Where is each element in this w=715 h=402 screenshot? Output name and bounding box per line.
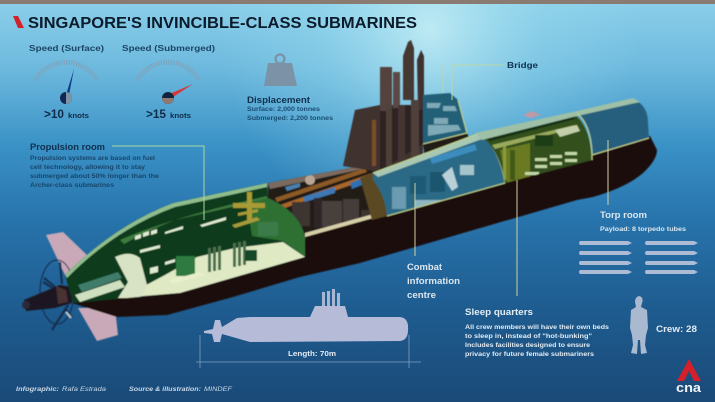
section: central machinery	[268, 160, 377, 238]
propeller	[22, 260, 74, 330]
conning tower	[343, 40, 470, 172]
masts	[372, 40, 424, 166]
sleep quarters text: Sleep quarters	[465, 307, 533, 318]
torp room text	[600, 210, 686, 233]
propulsion room text: Archer-class submarines	[30, 182, 115, 189]
submarine cutaway	[22, 40, 657, 341]
propulsion room text: cell technology, allowing it to stay	[30, 164, 146, 171]
gauge: surface speed	[29, 43, 104, 121]
propulsion room text: submerged about 50% longer than the	[30, 173, 160, 180]
sleep quarters text: All crew members will have their own beds	[465, 324, 609, 331]
icon: crew silhouette	[630, 296, 648, 354]
gauge: submerged speed: knots	[170, 111, 191, 120]
leader line: sleep quarters	[516, 180, 518, 296]
sleep quarters text: privacy for future female submariners	[465, 351, 594, 358]
combat information centre label: centre	[407, 290, 436, 301]
cna logo	[676, 359, 702, 395]
propulsion room text: Propulsion room	[30, 142, 105, 152]
displacement text: Surface: 2,000 tonnes	[247, 106, 320, 113]
section: propulsion room	[65, 183, 305, 303]
icon: weight	[264, 54, 297, 86]
title: SINGAPORE'S INVINCIBLE-CLASS SUBMARINES	[28, 15, 417, 32]
credits: Infographic:	[16, 386, 59, 393]
section: sleep quarters	[480, 113, 592, 183]
gauge: submerged speed: Speed (Submerged)	[122, 43, 215, 53]
credits: Source & illustration:	[129, 386, 201, 393]
displacement text: Displacement	[247, 95, 311, 106]
leader line: bridge	[443, 65, 503, 100]
icon: eight torpedoes	[579, 241, 698, 274]
bridge label: Bridge	[507, 60, 538, 70]
deck hatch	[523, 111, 541, 118]
sleep quarters text: Includes facilities designed to ensure	[465, 342, 590, 349]
displacement text	[247, 95, 333, 122]
leader line: propulsion room	[112, 146, 204, 220]
section: bridge	[423, 93, 467, 144]
section: combat information centre	[360, 133, 505, 220]
silhouette: submarine length diagram	[196, 289, 421, 368]
cna logo: cna	[676, 380, 702, 395]
combat information centre label: Combat	[407, 262, 443, 273]
credits: MINDEF	[204, 386, 233, 393]
silhouette: submarine length diagram: Length: 70m	[288, 349, 336, 358]
crew label: Crew: 28	[656, 324, 697, 335]
outer hull	[72, 136, 657, 317]
credits	[16, 386, 233, 393]
propulsion room text	[30, 142, 160, 189]
gauge: submerged speed: >15	[146, 109, 167, 121]
displacement text: Submerged: 2,200 tonnes	[247, 115, 333, 122]
gauge: surface speed: knots	[68, 111, 89, 120]
gauge: submerged speed	[122, 43, 215, 121]
propulsion room text: Propulsion systems are based on fuel	[30, 155, 155, 162]
leader line: torp room	[607, 140, 609, 205]
combat information centre label: information	[407, 276, 460, 287]
gauge: surface speed: >10	[44, 109, 64, 121]
section: torpedo room	[475, 98, 649, 160]
gauge: surface speed: Speed (Surface)	[29, 43, 104, 53]
credits: Rafa Estrada	[62, 386, 106, 393]
torp room text: Torp room	[600, 210, 647, 220]
rudder fins	[46, 232, 118, 341]
combat information centre label	[407, 262, 460, 301]
torp room text: Payload: 8 torpedo tubes	[600, 226, 686, 233]
leader line: combat information centre	[414, 183, 416, 256]
sleep quarters text: to sleep in, instead of "hot-bunking"	[465, 333, 592, 340]
sleep quarters text	[465, 307, 609, 358]
